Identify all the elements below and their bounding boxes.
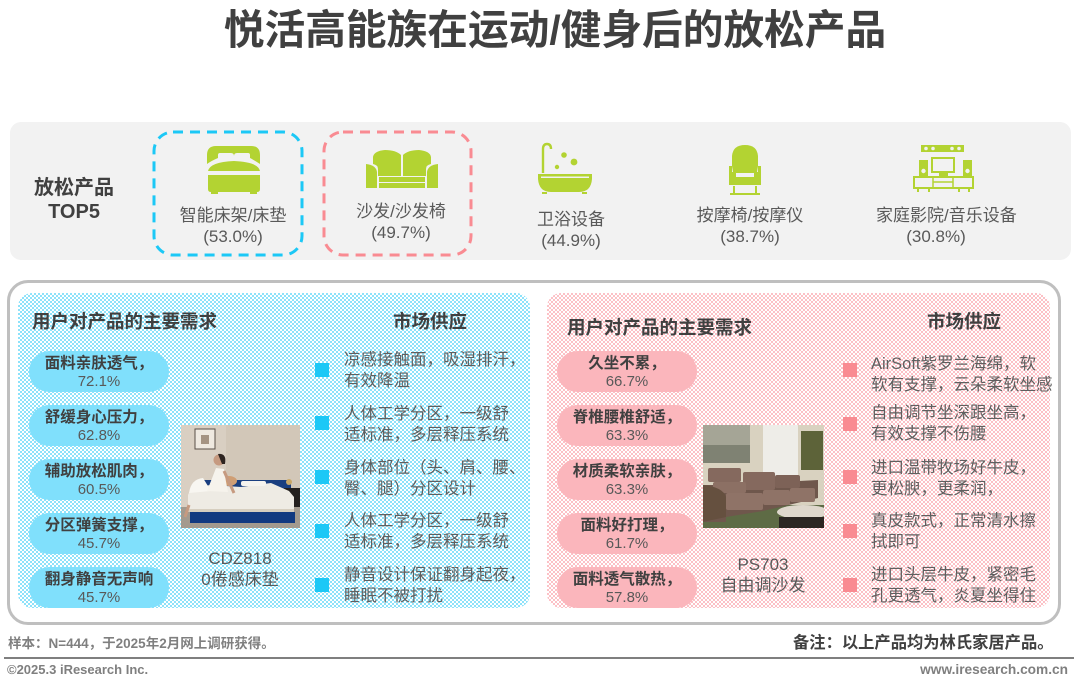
need pill 4 [557, 513, 697, 554]
item: sofa [356, 202, 446, 242]
need pill 5 [557, 567, 697, 608]
need pill 2: 63.3% [606, 427, 648, 444]
copyright: ©2025.3 iResearch Inc. [7, 662, 148, 677]
heading: user needs: 用户对产品的主要需求 [32, 311, 217, 332]
supply bullet 4 [843, 524, 857, 538]
item: home theater: (30.8%) [906, 226, 966, 246]
supply text 1: AirSoft紫罗兰海绵，软 [871, 355, 1036, 373]
caption: PS703 sofa: 自由调沙发 [720, 576, 806, 595]
supply text 4 [871, 512, 1036, 551]
supply text 5: 静音设计保证翻身起夜， [344, 566, 526, 584]
title: 悦活高能族在运动/健身后的放松产品 [224, 7, 886, 53]
heading: market supply: 市场供应 [927, 311, 1001, 332]
supply text 1: 凉感接触面，吸湿排汗， [344, 351, 526, 369]
caption: PS703 sofa: PS703 [737, 555, 789, 574]
supply text 3: 更松腴，更柔润， [871, 480, 1003, 498]
need pill 3 [557, 459, 697, 500]
supply bullet 2 [843, 417, 857, 431]
sample note: 样本：N=444，于2025年2月网上调研获得。 [8, 636, 275, 651]
item: bathtub: 卫浴设备 [537, 210, 605, 229]
supply text 4: 拭即可 [871, 533, 920, 551]
item: sofa: 沙发/沙发椅 [356, 202, 446, 221]
icon: bed [207, 146, 260, 194]
supply bullet 2 [315, 416, 329, 430]
icon: home theater [913, 145, 974, 192]
need pill 5: 57.8% [606, 589, 648, 606]
need pill 2: 脊椎腰椎舒适， [573, 409, 681, 426]
need pill 2: 舒缓身心压力， [45, 409, 153, 426]
need pill 5: 45.7% [78, 589, 120, 606]
item: sofa: (49.7%) [371, 222, 431, 242]
icon: sofa [366, 150, 438, 188]
supply bullet 1 [315, 363, 329, 377]
supply text 4: 人体工学分区，一级舒 [344, 512, 509, 530]
caption: CDZ818 mattress: CDZ818 [208, 549, 272, 568]
need pill 3: 63.3% [606, 481, 648, 498]
need pill 1: 面料亲肤透气， [45, 355, 153, 372]
need pill 5 [29, 567, 169, 608]
caption: CDZ818 mattress: 0倦感床垫 [201, 570, 279, 589]
item: home theater: 家庭影院/音乐设备 [876, 206, 1017, 225]
dashed highlight: bed [152, 130, 304, 256]
supply text 3 [871, 458, 1036, 498]
supply text 2: 自由调节坐深跟坐高， [871, 404, 1036, 422]
need pill 3: 60.5% [78, 481, 120, 498]
need pill 1: 久坐不累， [588, 355, 666, 372]
supply text 2 [871, 404, 1036, 443]
supply text 1 [871, 354, 1052, 394]
outer frame [7, 280, 1061, 625]
supply bullet 3 [315, 470, 329, 484]
supply text 1: 有效降温 [344, 372, 410, 390]
supply text 5 [871, 566, 1036, 605]
need pill 5: 面料透气散热， [573, 571, 681, 588]
need pill 2 [557, 405, 697, 446]
supply bullet 3 [843, 470, 857, 484]
supply bullet 5 [843, 578, 857, 592]
need pill 1 [557, 351, 697, 392]
icon: massage chair [729, 145, 761, 195]
need pill 3 [29, 459, 169, 500]
need pill 4: 分区弹簧支撑， [45, 517, 153, 534]
heading: TOP5 [34, 176, 114, 223]
need pill 4 [29, 513, 169, 554]
supply text 5: 睡眠不被打扰 [344, 587, 443, 605]
need pill 1: 72.1% [78, 373, 120, 390]
need pill 3: 材质柔软亲肤， [573, 463, 681, 480]
caption: CDZ818 mattress [201, 549, 279, 589]
photo: brown sofa [703, 425, 824, 528]
supply text 1: 软有支撑，云朵柔软坐感 [871, 376, 1052, 394]
panel: sofa [547, 293, 1050, 608]
supply text 5: 进口头层牛皮，紧密毛 [871, 566, 1036, 584]
heading: user needs: 用户对产品的主要需求 [567, 317, 752, 338]
item: bathtub: (44.9%) [541, 230, 601, 250]
item: bed: (53.0%) [203, 226, 263, 246]
item: massage chair: (38.7%) [720, 226, 780, 246]
supply bullet 5 [315, 578, 329, 592]
heading: TOP5: 放松产品 [34, 177, 114, 199]
item: bathtub [537, 210, 605, 250]
supply text 3 [344, 458, 526, 498]
supply text 1 [344, 350, 526, 390]
supply text 5: 孔更透气，炎夏坐得住 [871, 587, 1036, 605]
supply text 2: 适标准，多层释压系统 [344, 426, 509, 444]
supply bullet 4 [315, 524, 329, 538]
supply text 2 [344, 404, 509, 444]
photo: woman on mattress [181, 425, 300, 528]
item: home theater [876, 206, 1017, 246]
website: www.iresearch.com.cn [920, 662, 1068, 677]
supply text 2: 有效支撑不伤腰 [871, 425, 986, 443]
need pill 3: 辅助放松肌肉， [45, 463, 153, 480]
panel: bed mattress [18, 293, 530, 608]
need pill 4: 面料好打理， [580, 517, 674, 534]
need pill 4: 61.7% [606, 535, 648, 552]
supply text 5 [344, 566, 526, 605]
item: massage chair: 按摩椅/按摩仪 [697, 206, 803, 225]
item: bed [180, 206, 286, 246]
item: bed: 智能床架/床垫 [180, 206, 286, 225]
caption: PS703 sofa [720, 555, 806, 595]
panel: relaxation products TOP5 [10, 122, 1071, 260]
heading: market supply: 市场供应 [393, 311, 467, 332]
supply text 3: 臀、腿）分区设计 [344, 480, 476, 498]
supply text 4: 适标准，多层释压系统 [344, 533, 509, 551]
need pill 4: 45.7% [78, 535, 120, 552]
heading: TOP5: TOP5 [48, 201, 100, 223]
need pill 2 [29, 405, 169, 446]
item: massage chair [697, 206, 803, 246]
remark: 备注：以上产品均为林氏家居产品。 [793, 634, 1054, 652]
dashed highlight: sofa [322, 130, 472, 256]
need pill 5: 翻身静音无声响 [45, 571, 153, 588]
need pill 2: 62.8% [78, 427, 120, 444]
need pill 1 [29, 351, 169, 392]
supply text 4: 真皮款式，正常清水擦 [871, 512, 1036, 530]
supply text 2: 人体工学分区，一级舒 [344, 405, 509, 423]
supply bullet 1 [843, 363, 857, 377]
supply text 3: 身体部位（头、肩、腰、 [344, 459, 526, 477]
icon: bathtub [538, 142, 592, 194]
supply text 3: 进口温带牧场好牛皮， [871, 459, 1036, 477]
supply text 4 [344, 512, 509, 551]
need pill 1: 66.7% [606, 373, 648, 390]
